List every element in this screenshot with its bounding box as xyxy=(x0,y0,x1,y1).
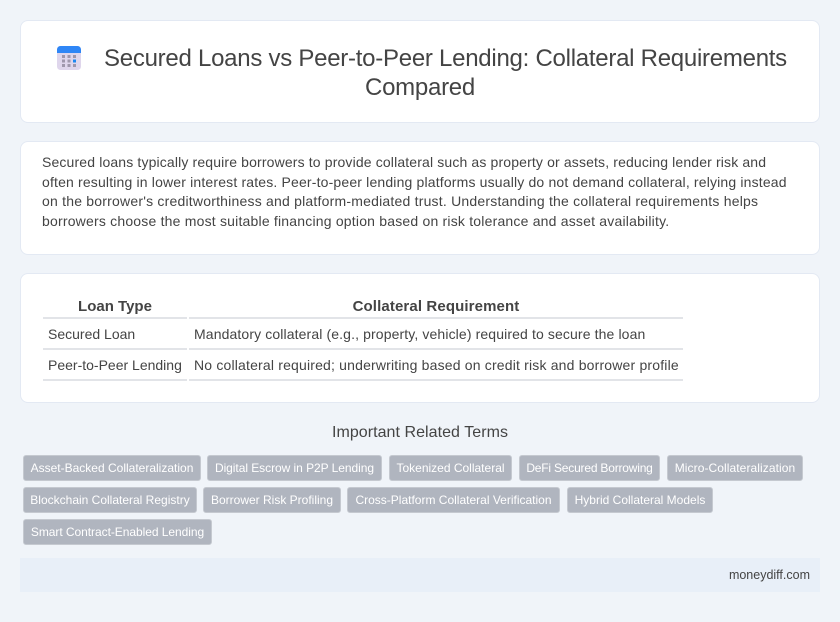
tag xyxy=(207,455,382,481)
tag xyxy=(389,455,512,481)
tag xyxy=(667,455,803,481)
tag xyxy=(567,487,713,513)
tag: Hybrid Collateral Models xyxy=(575,493,705,507)
tag: Asset-Backed Collateralization xyxy=(31,461,193,475)
text block: introduction xyxy=(42,154,787,229)
title line 2: Compared xyxy=(365,74,475,101)
text block: introduction: borrowers choose the most suitable financing option based on risk tolerance and asset availability. xyxy=(42,213,669,229)
row value: peer-to-peer lending: No collateral required; underwriting based on credit risk and borrower profile xyxy=(194,357,679,373)
title xyxy=(104,45,787,101)
tag: Digital Escrow in P2P Lending xyxy=(215,461,374,475)
table: collateral comparison xyxy=(43,298,683,381)
heading: related terms: Important Related Terms xyxy=(332,424,508,441)
tag: Smart Contract-Enabled Lending xyxy=(31,525,204,539)
tag xyxy=(203,487,341,513)
tag: Cross-Platform Collateral Verification xyxy=(355,493,552,507)
tag xyxy=(519,455,660,481)
text block: introduction: Secured loans typically require borrowers to provide collateral such as property or assets, reducing lender risk and xyxy=(42,154,766,170)
row value: secured loan: Mandatory collateral (e.g., property, vehicle) required to secure the loan xyxy=(194,326,645,342)
row label: secured loan: Secured Loan xyxy=(48,326,135,342)
footer bar xyxy=(20,558,820,592)
row label: peer-to-peer lending: Peer-to-Peer Lending xyxy=(48,357,182,373)
tag xyxy=(23,455,201,481)
tag xyxy=(347,487,560,513)
tag: DeFi Secured Borrowing xyxy=(526,461,653,475)
panel: title card xyxy=(20,20,820,123)
tag list: related terms xyxy=(23,455,803,545)
tag xyxy=(23,519,212,545)
table header: collateral requirement: Collateral Requirement xyxy=(353,298,519,315)
tag: Borrower Risk Profiling xyxy=(211,493,333,507)
panel: intro text card xyxy=(20,141,820,255)
text block: introduction: often resulting in lower interest rates. Peer-to-peer lending platforms usually do not demand collateral, relying instead xyxy=(42,174,787,190)
tag xyxy=(23,487,197,513)
text block: introduction: on the borrower's creditworthiness and platform-mediated trust. Understanding the collateral requirements helps xyxy=(42,193,758,209)
footer credit: moneydiff.com xyxy=(729,568,810,582)
title line 1: Secured Loans vs Peer-to-Peer Lending: Collateral Requirements xyxy=(104,45,787,72)
icon: calendar xyxy=(57,46,81,70)
tag: Tokenized Collateral xyxy=(396,461,505,475)
table header: loan type: Loan Type xyxy=(78,298,152,315)
tag: Micro-Collateralization xyxy=(675,461,795,475)
tag: Blockchain Collateral Registry xyxy=(30,493,190,507)
panel: comparison table card xyxy=(20,273,820,403)
